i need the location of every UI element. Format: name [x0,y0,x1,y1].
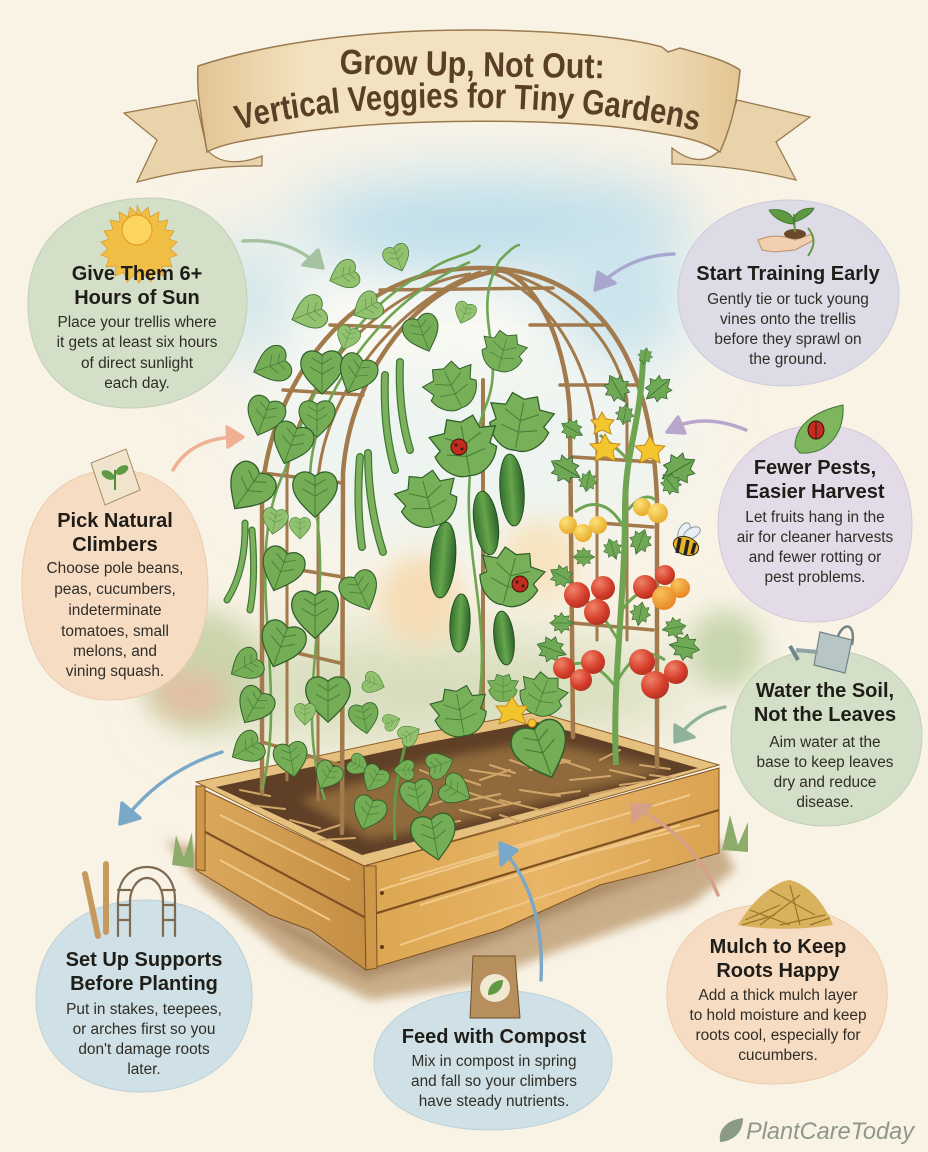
bed top rim [196,712,719,866]
arrow: water to plant [675,707,725,742]
heading: Before Planting [70,973,218,995]
center post [481,380,485,720]
body text: air for cleaner harvests [737,529,894,546]
heading: Easier Harvest [746,481,885,503]
icon: seed packet [91,449,140,505]
panel: water the soil [731,626,922,826]
seedling plant at bed front [344,711,478,864]
arched trellis [262,268,657,833]
heading: Not the Leaves [754,704,896,726]
vine stems [262,245,520,800]
arrow: pests to plant [667,417,746,433]
body text: tomatoes, small [61,623,169,640]
title line 1: Grow Up, Not Out: [339,43,605,86]
heading: Pick Natural [57,510,173,532]
yellow flowers [590,412,665,463]
body text: peas, cucumbers, [54,581,176,598]
ribbon body [198,30,740,152]
bubble [36,900,252,1092]
heading: Water the Soil, [756,680,894,702]
icon: hand with sprout [758,208,814,256]
body text: to hold moisture and keep [689,1007,867,1024]
grass tufts [172,815,748,868]
tomatoes [553,498,690,699]
soil [216,722,698,855]
icon: sun [101,205,177,283]
body text: Choose pole beans, [47,560,183,577]
bubble [718,425,912,622]
tomato stem and branches [615,360,643,765]
bumble bee [671,521,702,559]
body text: Let fruits hang in the [745,509,885,526]
body text: melons, and [73,643,157,660]
trellis rungs [262,288,653,765]
body text: cucumbers. [738,1047,818,1064]
body text: don't damage roots [78,1041,210,1058]
panel: fewer pests [718,405,912,622]
body text: have steady nutrients. [419,1093,569,1110]
mulch straw [240,750,675,840]
body text: before they sprawl on [714,331,862,348]
bed right face [364,768,719,970]
heading: Climbers [72,534,158,556]
body text: the ground. [749,351,827,368]
body text: Place your trellis where [57,314,217,331]
title ribbon banner [122,29,812,183]
heading: Feed with Compost [402,1026,587,1048]
body text: Aim water at the [769,734,881,751]
bed left face [196,786,366,970]
back arch [262,268,657,793]
brand logo [720,1118,916,1145]
icon: compost bag [470,956,520,1018]
ground dirt [165,840,735,1000]
front arch [342,270,573,833]
icon: stakes and arch [85,864,175,936]
watercolor background wash [140,175,763,745]
panel: feed with compost [374,956,612,1130]
heading: Set Up Supports [66,949,222,971]
arrow: training to trellis [595,254,674,290]
cucumbers [427,453,526,666]
heading: Roots Happy [716,960,841,982]
cucumber plant [391,299,578,787]
body text: or arches first so you [73,1021,215,1038]
body text: Mix in compost in spring [411,1053,577,1070]
body text: it gets at least six hours [57,334,218,351]
logo wordmark: PlantCareToday [746,1118,916,1145]
raised garden bed [165,712,748,1000]
arrow: climbers to trellis [173,427,243,470]
bean leaves [216,241,446,795]
panel: pick natural climbers [22,449,208,700]
body text: and fewer rotting or [749,549,881,566]
panel: start training [678,200,899,386]
inner rails [287,270,627,800]
body text: and fall so your climbers [411,1073,577,1090]
bubble [678,200,899,386]
body text: vining squash. [66,663,164,680]
icon: logo leaf [720,1118,743,1142]
heading: Mulch to Keep [710,936,846,958]
ribbon left tail [124,100,262,182]
bubble [374,990,612,1130]
cucumber leaves [391,299,578,787]
body text: disease. [796,794,854,811]
heading: Fewer Pests, [754,457,876,479]
icon: mulch pile [738,880,833,929]
body text: roots cool, especially for [695,1027,861,1044]
arrow: mulch to bed [632,805,718,895]
bubble [22,470,208,700]
arrow: sun to trellis [243,241,323,268]
heading: Give Them 6+ [72,263,202,285]
icon: ladybug on leaf [795,405,843,453]
body text: later. [127,1061,161,1078]
corner posts [196,786,377,970]
bubble [731,650,922,826]
bubble [667,905,887,1084]
arrows [120,241,746,980]
heading: Start Training Early [696,263,881,285]
tomato leaves [533,346,703,667]
body text: base to keep leaves [757,754,894,771]
body text: Gently tie or tuck young [707,291,869,308]
heading: Hours of Sun [74,287,200,309]
squash flower [496,697,536,727]
ladybugs on leaves [451,439,528,592]
body text: Put in stakes, teepees, [66,1001,222,1018]
body text: each day. [104,375,170,392]
mulch patch [300,740,670,840]
bubble [28,198,247,408]
green beans [227,362,410,610]
tomato plant [533,346,703,765]
body text: indeterminate [68,602,162,619]
body text: dry and reduce [774,774,876,791]
panel: give them sun [28,198,247,408]
icon: watering can [790,626,853,673]
arrow: compost to bed [500,843,541,980]
bean vines on left trellis [216,241,520,800]
body text: pest problems. [765,569,865,586]
body text: Add a thick mulch layer [698,987,858,1004]
body text: of direct sunlight [81,355,194,372]
panel: mulch [667,880,887,1084]
title line 2: Vertical Veggies for Tiny Gardens [232,82,700,130]
arrow: supports [120,752,222,824]
ribbon right tail [672,100,810,180]
body text: vines onto the trellis [720,311,856,328]
panel: set up supports [36,864,252,1092]
